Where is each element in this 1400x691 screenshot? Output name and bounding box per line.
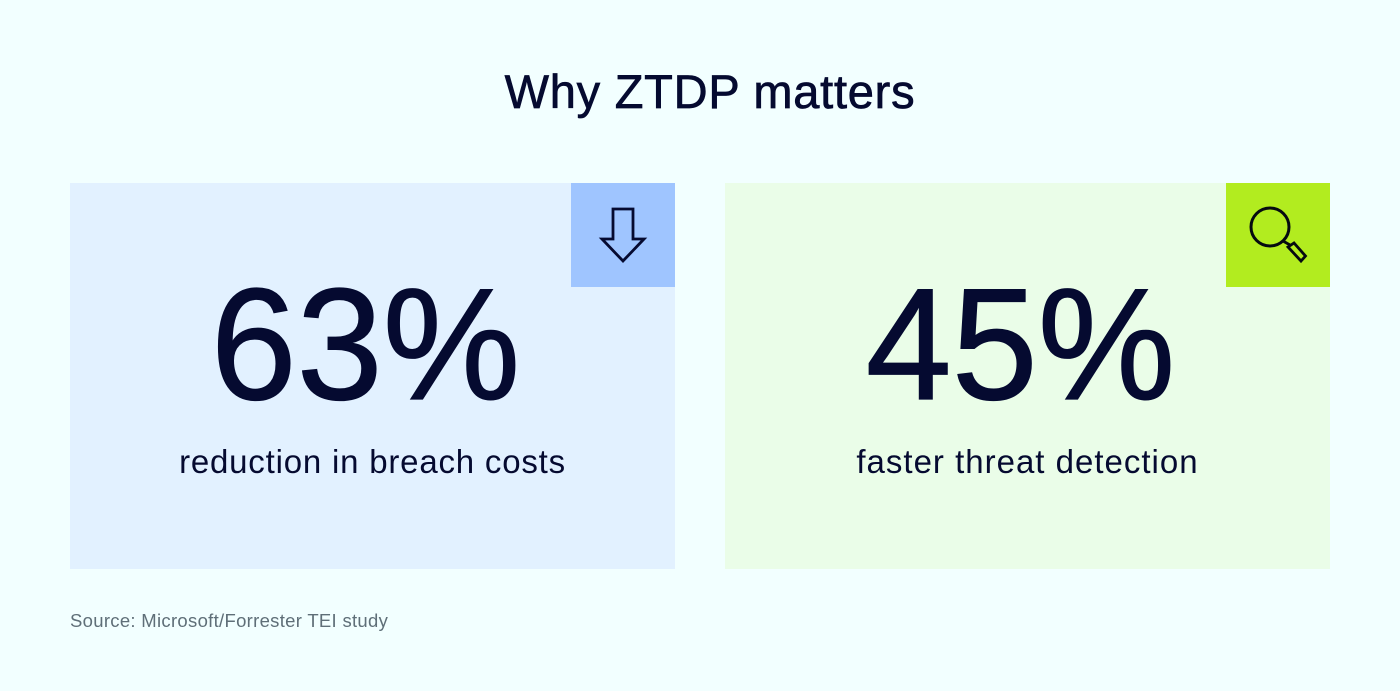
panel: breach costs [70,183,675,569]
stat: 45%: 45% [866,255,1175,433]
title: Why ZTDP matters [505,65,915,118]
source note: Source: Microsoft/Forrester TEI study [70,610,388,631]
label: faster threat detection: faster threat detection [856,443,1199,480]
stat: 63%: 63% [211,255,520,433]
icon: magnifying glass [1226,183,1330,287]
icon: down arrow [571,183,675,287]
panel: threat detection [725,183,1330,569]
label: reduction in breach costs: reduction in breach costs [179,443,566,480]
